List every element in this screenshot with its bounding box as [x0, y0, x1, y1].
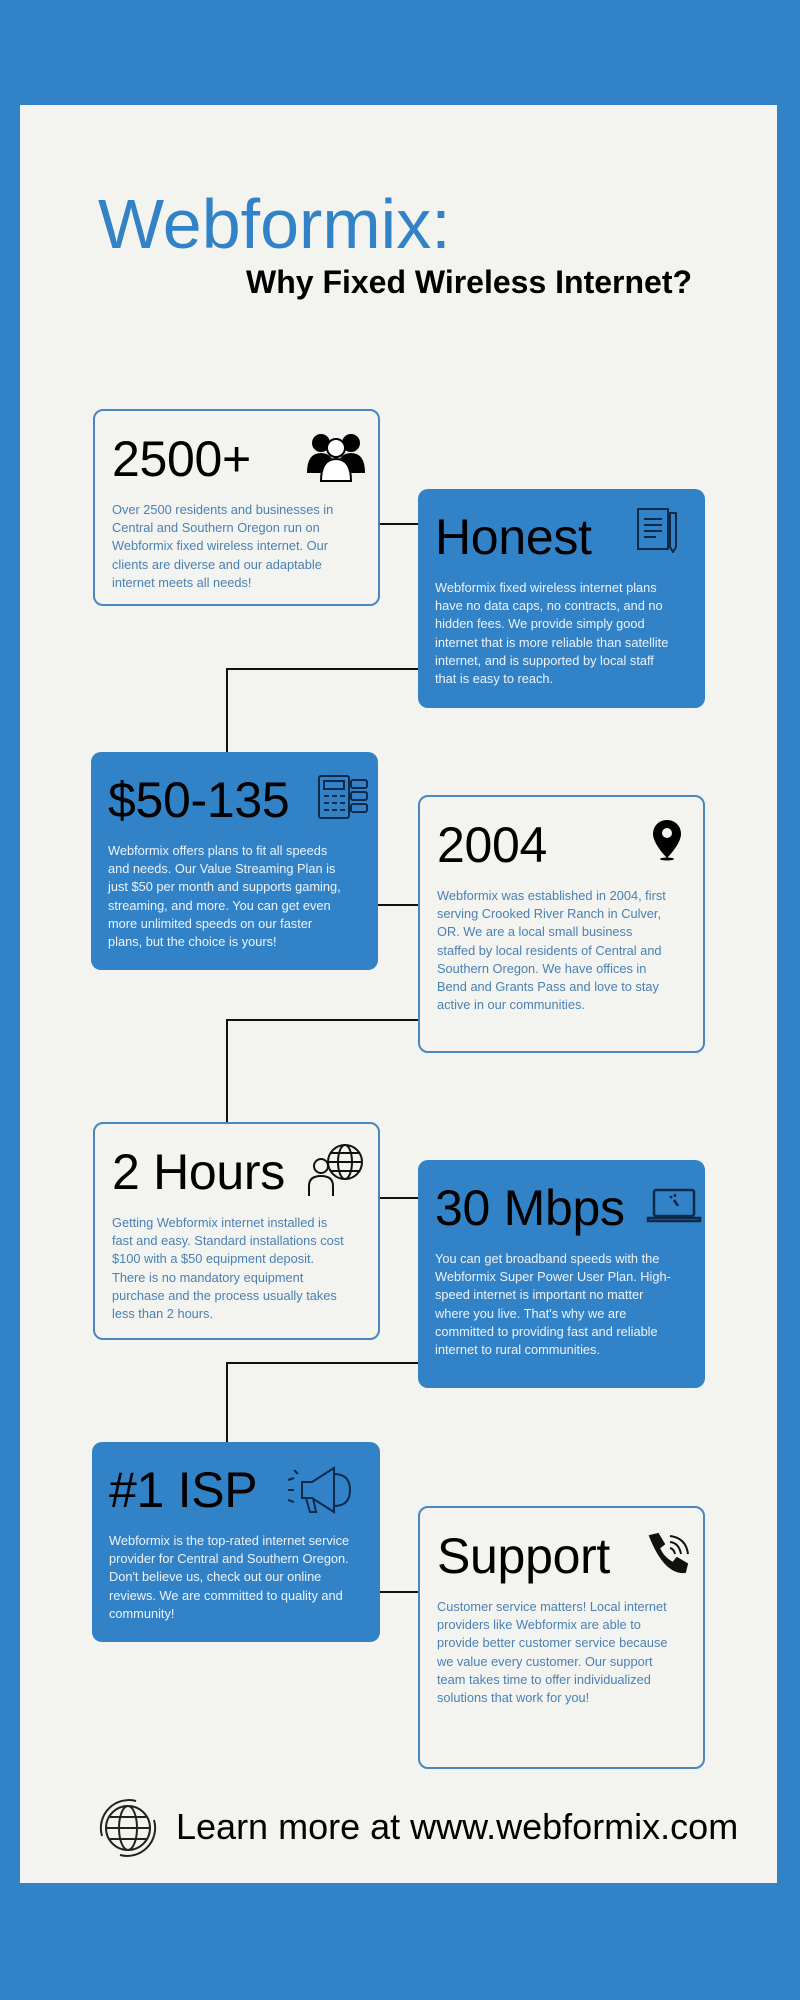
panel: Honest — [418, 489, 705, 708]
heading: 30 Mbps: 30 Mbps — [435, 1180, 625, 1236]
text: established: Webformix was established in 2004, first serving Crooked River Ranch in Culver, OR. We are a local small business staffed by local residents of Central and Southern Oregon. We have offices in Bend and Grants Pass and love to stay active in our communities. — [437, 888, 666, 1012]
text: url: Learn more at www.webformix.com — [176, 1806, 738, 1847]
footer: learn more — [100, 1799, 738, 1857]
text: honest: Webformix fixed wireless internet plans have no data caps, no contracts, and no hidden fees. We provide simply good internet that is more reliable than satellite internet, and is supported by local staff that is easy to reach. — [435, 580, 668, 686]
text: install: Getting Webformix internet installed is fast and easy. Standard installations cost $100 with a $50 equipment deposit. There is no mandatory equipment purchase and the process usually takes less than 2 hours. — [112, 1215, 344, 1321]
icon: globe — [100, 1799, 156, 1857]
subtitle: Why Fixed Wireless Internet? — [246, 264, 692, 300]
icon: people — [307, 434, 365, 482]
panel: 2500+ — [93, 409, 380, 606]
text: customer service: Customer service matters! Local internet providers like Webformix are able to provide better customer service because we value every customer. Our support team takes time to offer individualized solutions that work for you! — [437, 1599, 667, 1705]
panel: 2004 — [418, 795, 705, 1053]
heading: Support: Support — [437, 1528, 610, 1584]
icon: person globe — [308, 1144, 363, 1196]
panel: 2 Hours — [93, 1122, 380, 1340]
panel: Support — [418, 1506, 705, 1769]
title: Webformix: — [98, 185, 451, 263]
panel: #1 ISP — [92, 1442, 380, 1642]
text: top rated: Webformix is the top-rated internet service provider for Central and Southern Oregon. Don't believe us, check out our online reviews. We are committed to quality and community! — [109, 1533, 349, 1621]
text: residents: Over 2500 residents and businesses in Central and Southern Oregon run on Webformix fixed wireless internet. Our clients are diverse and our adaptable internet meets all needs! — [112, 502, 333, 590]
heading: price: $50-135 — [108, 772, 289, 828]
heading: 2 Hours: 2 Hours — [112, 1144, 285, 1200]
text: speeds: You can get broadband speeds with the Webformix Super Power User Plan. High-speed internet is important no matter where you live. That's why we are committed to providing fast and reliable internet to rural communities. — [435, 1251, 671, 1357]
icon: calculator — [318, 775, 368, 819]
heading: 2004: 2004 — [437, 817, 547, 873]
panel: 30 Mbps — [418, 1160, 705, 1388]
icon: laptop — [646, 1188, 702, 1222]
icon: location pin — [653, 820, 681, 860]
heading: 2500+: 2500+ — [112, 431, 251, 487]
icon: document — [637, 508, 677, 553]
heading: #1 ISP: #1 ISP — [109, 1462, 257, 1518]
heading: Honest: Honest — [435, 509, 592, 565]
icon: phone — [648, 1532, 689, 1574]
text: plans: Webformix offers plans to fit all speeds and needs. Our Value Streaming Plan is just $50 per month and supports gaming, streaming, and more. You can get even more unlimited speeds on our faster plans, but the choice is yours! — [108, 843, 341, 949]
panel: $50-135 — [91, 752, 378, 970]
icon: megaphone — [288, 1466, 351, 1514]
